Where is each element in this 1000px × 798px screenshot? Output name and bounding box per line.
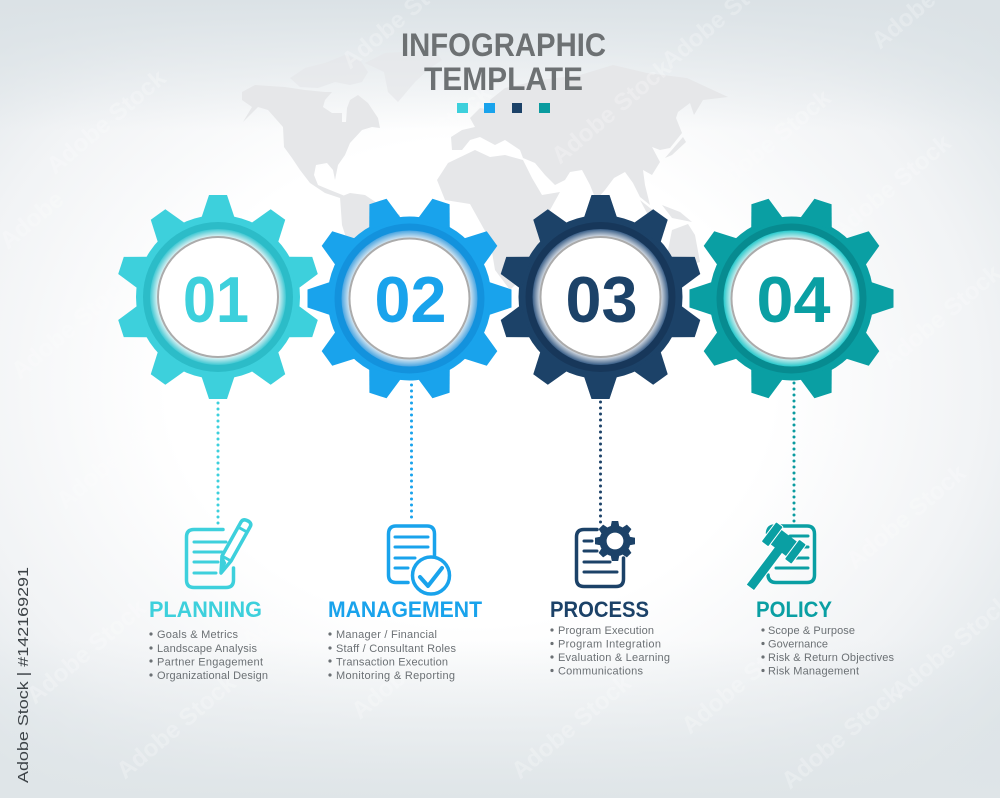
gear 03: 03 [566,263,638,336]
list: policy: Risk Management [768,666,859,678]
watermark: Adobe Stock [42,64,172,180]
list: management [328,629,456,682]
colour key squares [457,103,550,113]
watermark: Adobe Stock [707,84,837,200]
watermark: Adobe Stock [22,594,152,710]
list: process [550,625,670,678]
heading: policy: POLICY [756,597,832,622]
panel: process [550,597,670,678]
connector: planning [216,403,220,525]
list: management: Transaction Execution [336,656,448,668]
icon: document with pencil [186,520,251,588]
watermark: Adobe Stock [347,609,477,725]
world map [242,50,728,290]
panel: management [328,597,483,682]
gear 02 [281,170,538,427]
list: policy [761,625,894,678]
list: management: Staff / Consultant Roles [336,643,456,655]
list: planning: Goals & Metrics [157,629,238,641]
list: policy: Governance [768,638,828,650]
connector: process [599,402,602,524]
gear 01: 01 [183,263,249,336]
list: planning [149,629,268,682]
watermark: Adobe Stock [52,399,182,515]
gear 01 [116,195,320,399]
list: planning: Organizational Design [157,670,268,682]
gear 03 [498,195,703,399]
panel: planning [149,597,268,682]
title: TEMPLATE [424,61,583,97]
title [401,27,606,97]
title: INFOGRAPHIC [401,27,606,63]
list: process: Evaluation & Learning [558,652,670,664]
gear 02: 02 [374,263,446,336]
gear 04: 04 [756,263,830,336]
list: policy: Scope & Purpose [768,625,855,637]
watermark: Adobe Stock [827,129,957,245]
list: planning: Partner Engagement [157,656,263,668]
connector: policy [792,383,796,522]
watermark: Adobe Stock [237,539,367,655]
watermark: Adobe Stock [507,449,637,565]
watermark: Adobe Stock [777,679,907,795]
list: management: Monitoring & Reporting [336,670,455,682]
list: planning: Landscape Analysis [157,643,258,655]
panel: policy [756,597,894,678]
icon: document with check [388,526,450,594]
list: management: Manager / Financial [336,629,437,641]
icon: document with gavel [735,522,814,599]
list: process: Communications [558,666,644,678]
watermark: Adobe Stock [212,409,342,525]
watermark: Adobe Stock [367,79,497,195]
heading: planning: PLANNING [149,597,262,622]
heading: management: MANAGEMENT [328,597,483,622]
list: process: Program Integration [558,638,661,650]
list: process: Program Execution [558,625,654,637]
connector: management [410,385,413,522]
list: policy: Risk & Return Objectives [768,652,894,664]
watermark: Adobe Stock [7,269,137,385]
watermark: Adobe Stock [717,414,847,530]
heading: process: PROCESS [550,597,649,622]
watermark: Adobe Stock [677,624,807,740]
watermark: Adobe Stock [547,54,677,170]
gear 04 [663,170,920,427]
watermark: Adobe Stock [507,669,637,785]
watermark: Adobe Stock [112,669,242,785]
stock id credit: Adobe Stock | #142169291 [15,567,32,783]
watermark: Adobe Stock [402,379,532,495]
icon: document with gear [576,521,635,586]
watermark: Adobe Stock [842,459,972,575]
